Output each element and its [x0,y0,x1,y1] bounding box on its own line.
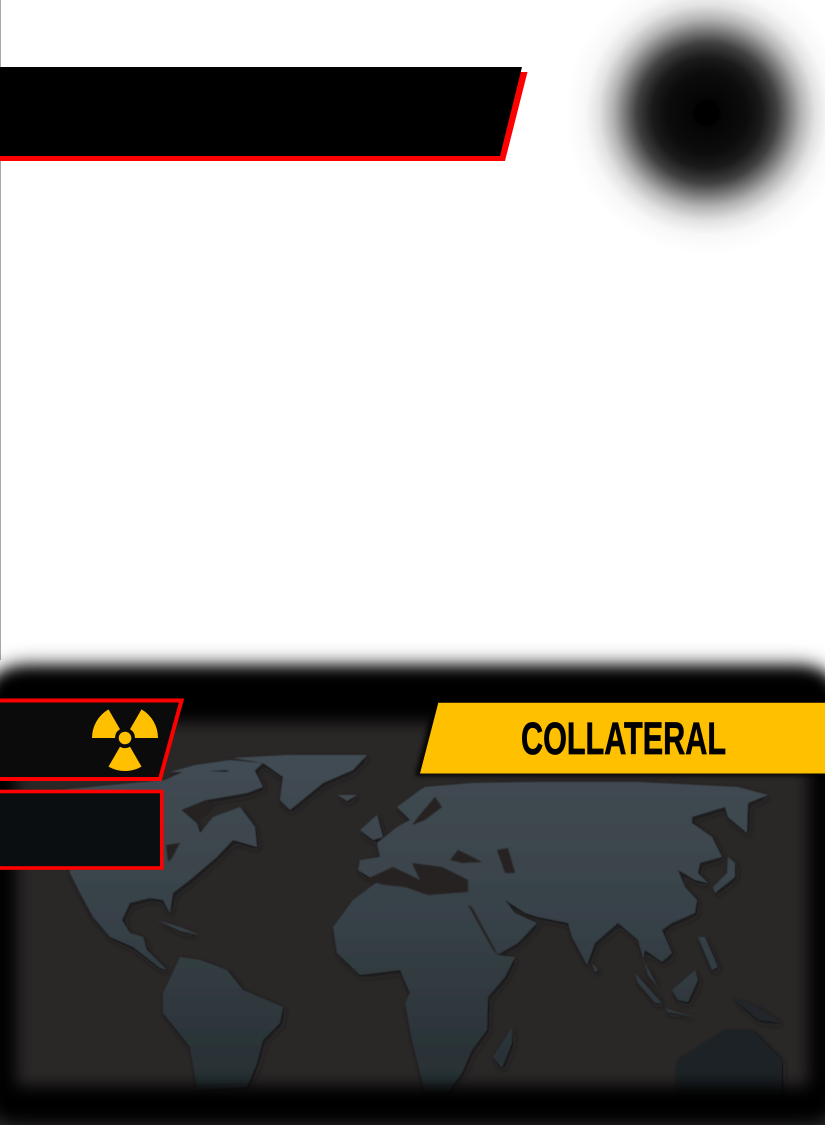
Great Lakes [166,843,180,862]
Eurasia and Africa [333,782,768,1092]
Madagascar [493,1027,512,1068]
Borneo [672,970,698,1002]
page edge line [0,0,1,660]
Sri Lanka [592,963,598,972]
Hudson Bay detail [182,800,215,823]
Baltic Sea [412,797,442,825]
banner yellow shape [420,703,825,774]
Australia [677,1030,782,1095]
banner shadow [415,702,825,776]
Caspian Sea [497,848,515,873]
United Kingdom [360,815,383,840]
New Guinea [732,997,782,1023]
Arctic islands [170,760,263,775]
map continents [60,755,782,1095]
second panel box [0,792,162,868]
banner black bar [0,67,522,156]
world map panel [0,648,825,1125]
Greenland [233,755,367,810]
blurred black frame [0,672,825,1124]
Black Sea [450,850,482,863]
Sumatra [635,973,662,1003]
Philippines [698,937,718,970]
icon: radiation symbol [92,709,158,771]
Iceland [338,795,357,801]
radiation panel [0,698,184,870]
map background [0,695,825,1125]
blurred black circle [557,0,825,263]
banner red offset [0,72,528,161]
North America [60,767,263,970]
Cuba [160,921,198,935]
Japan [713,857,735,893]
title banner [0,67,528,161]
banner label: COLLATERAL [521,713,726,764]
inland seas [166,797,515,955]
South America [163,957,283,1090]
radiation panel box [0,700,182,779]
collateral banner [414,702,825,778]
Mediterranean [365,863,468,895]
Red Sea [468,905,498,955]
frame soft top edge [0,667,825,727]
Java [666,1008,690,1016]
